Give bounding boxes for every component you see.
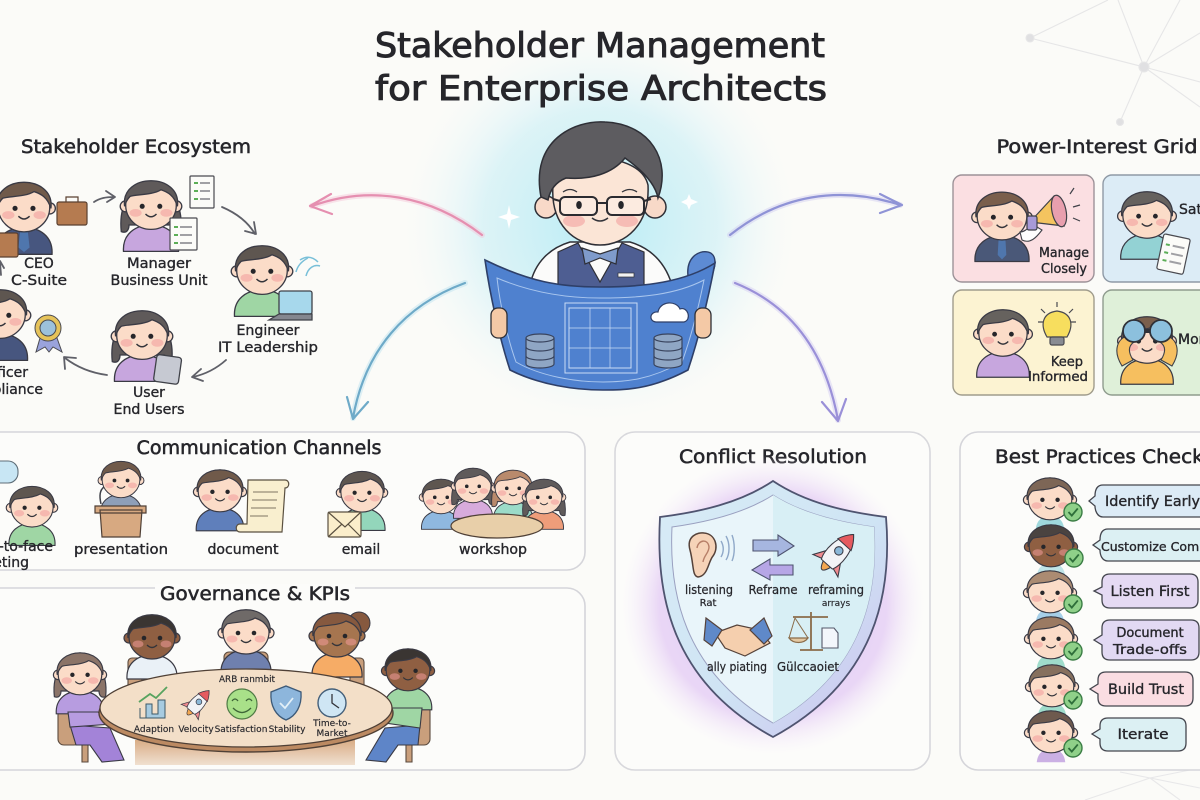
label: user: End Users bbox=[114, 402, 184, 418]
label: reframing: reframing bbox=[808, 583, 864, 597]
heading: Stakeholder Ecosystem bbox=[21, 137, 251, 158]
icon: envelope bbox=[328, 512, 361, 537]
icon: speech bubble bbox=[0, 461, 18, 483]
icon: signal bbox=[296, 257, 320, 276]
bow tie bbox=[582, 248, 618, 264]
heading: Conflict Resolution bbox=[679, 447, 867, 468]
vest bbox=[558, 243, 644, 288]
label bbox=[1028, 355, 1088, 385]
label: reframe: Reframe bbox=[748, 583, 798, 597]
icon: podium bbox=[95, 506, 146, 537]
arrow: CEO to manager bbox=[94, 191, 115, 202]
label: reframing: arrays bbox=[822, 599, 850, 609]
KPI: time-to-market: Time-to- bbox=[312, 719, 351, 729]
arrow: engineer to user bbox=[192, 360, 226, 381]
panel: governance and KPIs bbox=[0, 584, 585, 770]
label: reframing bbox=[808, 583, 864, 609]
label: CEO bbox=[11, 256, 67, 289]
KPI: adoption bbox=[134, 687, 174, 735]
table caption: ARB ranmbit bbox=[219, 675, 275, 685]
icon: briefcase bbox=[0, 197, 87, 257]
KPI: stability: Stability bbox=[269, 725, 306, 735]
person: manager with megaphone bbox=[972, 192, 1032, 262]
label: Informed bbox=[1028, 370, 1088, 385]
shield glow bbox=[621, 455, 925, 755]
item: build trust: Build Trust bbox=[1108, 682, 1185, 698]
blueprint sheet bbox=[485, 260, 715, 390]
item: email: email bbox=[342, 542, 380, 558]
item: listen first bbox=[1023, 571, 1198, 622]
item: identify early: Identify Early bbox=[1105, 494, 1200, 510]
arrow: to conflict resolution bbox=[735, 283, 846, 421]
blueprint grid bbox=[565, 303, 637, 373]
shield bbox=[659, 481, 887, 737]
architect head bbox=[535, 122, 666, 245]
item: document: document bbox=[208, 542, 279, 558]
label: ally piating: ally piating bbox=[707, 660, 767, 674]
label: manager: Manager bbox=[127, 256, 191, 272]
item: iterate bbox=[1024, 711, 1186, 762]
label: engineer: Engineer bbox=[236, 323, 300, 339]
panel: best practices checklist bbox=[960, 432, 1200, 770]
KPI: velocity: Velocity bbox=[178, 725, 214, 735]
label: manager bbox=[110, 256, 208, 289]
arrow: to communication channels bbox=[347, 283, 465, 419]
label: Keep bbox=[1051, 355, 1083, 370]
KPI: adoption: Adaption bbox=[134, 725, 174, 735]
label: manager: Business Unit bbox=[110, 273, 208, 289]
KPI: stability bbox=[269, 686, 306, 735]
quadrant: monitor bbox=[1103, 290, 1200, 395]
network decoration: bottom right bbox=[1085, 768, 1200, 800]
arrow: user to officer bbox=[64, 357, 107, 375]
item: identify early bbox=[1023, 478, 1200, 529]
title: Stakeholder Management bbox=[375, 26, 825, 66]
label: garbled: Gülccaoiet bbox=[777, 660, 839, 674]
person: table back 2 bbox=[218, 610, 274, 674]
icon: clipboard bbox=[1157, 234, 1190, 275]
workshop table bbox=[451, 514, 543, 538]
person: CEO bbox=[0, 182, 55, 254]
KPI: satisfaction bbox=[215, 689, 267, 735]
arrow: officer to CEO bbox=[0, 261, 4, 275]
arrow: manager to engineer bbox=[222, 207, 256, 234]
icon: exchange arrows bbox=[752, 535, 794, 580]
quadrant: keep informed bbox=[953, 290, 1094, 395]
item: presentation bbox=[74, 461, 168, 558]
item: customize comms bbox=[1024, 525, 1200, 576]
label: CEO: C-Suite bbox=[11, 273, 67, 289]
item: presentation: presentation bbox=[74, 542, 168, 558]
icon: rocket bbox=[809, 523, 866, 581]
item: build trust bbox=[1025, 665, 1193, 716]
heading: Power-Interest Grid bbox=[996, 137, 1198, 158]
label: listening: listening bbox=[685, 583, 733, 597]
title: for Enterprise Architects bbox=[375, 69, 827, 109]
KPI: velocity bbox=[178, 683, 218, 735]
blueprint cloud bbox=[651, 303, 688, 322]
panel: power-interest grid bbox=[953, 137, 1200, 395]
icon: laptop bbox=[269, 291, 312, 320]
label: CEO: CEO bbox=[24, 256, 54, 272]
item: listen first: Listen First bbox=[1110, 584, 1190, 600]
label: officer bbox=[0, 365, 43, 398]
network decoration: top right bbox=[1026, 0, 1200, 126]
blueprint databases bbox=[526, 334, 682, 368]
item: document trade-offs: Document bbox=[1116, 626, 1184, 641]
heading: Communication Channels bbox=[136, 438, 382, 459]
KPI: time-to-market: Market bbox=[317, 729, 348, 739]
person: with clipboard bbox=[1118, 192, 1176, 259]
arrow: to power-interest grid bbox=[730, 194, 902, 235]
panel: conflict resolution bbox=[615, 432, 930, 770]
quadrant: manage closely bbox=[953, 175, 1094, 282]
icon: binoculars bbox=[1123, 320, 1172, 342]
label: user bbox=[114, 385, 184, 418]
label: engineer bbox=[218, 323, 318, 356]
arrow: to stakeholder ecosystem bbox=[310, 194, 482, 235]
chairs bbox=[58, 652, 430, 762]
person: table right bbox=[366, 649, 435, 762]
item: workshop bbox=[419, 468, 566, 558]
arm bbox=[1020, 224, 1042, 241]
label: Manage bbox=[1039, 246, 1089, 261]
item: workshop: workshop bbox=[459, 542, 527, 558]
icon: checklists bbox=[170, 176, 214, 250]
blueprint roll bbox=[688, 252, 715, 276]
panel: communication channels bbox=[0, 432, 585, 571]
item: document trade-offs: Trade-offs bbox=[1112, 643, 1187, 658]
item: email bbox=[328, 471, 388, 558]
person bbox=[974, 310, 1032, 377]
person: engineer bbox=[231, 246, 293, 316]
icon: scroll bbox=[236, 480, 289, 532]
sparkles bbox=[498, 194, 698, 229]
title bbox=[375, 26, 827, 109]
hands bbox=[491, 308, 711, 338]
icon: tablet bbox=[153, 354, 182, 385]
icon: document bbox=[822, 628, 838, 648]
person: officer bbox=[0, 290, 31, 360]
person: table left bbox=[53, 653, 124, 762]
heading: Governance & KPIs bbox=[160, 584, 350, 605]
vest pocket bbox=[618, 273, 634, 277]
panel: stakeholder ecosystem bbox=[0, 137, 320, 418]
shoulders and shirt bbox=[530, 242, 672, 285]
label: listening bbox=[685, 583, 733, 609]
item: iterate: Iterate bbox=[1118, 727, 1168, 743]
label: listening: Rat bbox=[700, 598, 716, 609]
label: Closely bbox=[1041, 262, 1087, 277]
person: table back 3 bbox=[309, 612, 370, 677]
item: document trade-offs bbox=[1024, 617, 1199, 668]
quadrant: satisfy bbox=[1103, 175, 1200, 282]
icon: medal bbox=[35, 315, 62, 352]
item: document bbox=[193, 470, 289, 558]
central architect with blueprint bbox=[485, 122, 715, 390]
person: manager bbox=[120, 181, 182, 251]
item: face-to-face meeting bbox=[0, 461, 58, 571]
person: with binoculars bbox=[1118, 317, 1176, 384]
icon: handshake bbox=[704, 618, 772, 656]
icon: light bulb bbox=[1038, 302, 1076, 345]
label: engineer: IT Leadership bbox=[218, 340, 318, 356]
KPI: time-to-market bbox=[312, 689, 351, 739]
workshop people bbox=[419, 479, 463, 529]
icon: megaphone bbox=[1027, 188, 1080, 230]
label bbox=[1039, 246, 1089, 277]
icon: scales bbox=[789, 612, 828, 650]
arms bbox=[1117, 336, 1177, 366]
central glow bbox=[405, 30, 795, 420]
KPI: satisfaction: Satisfaction bbox=[215, 725, 267, 735]
person: user bbox=[111, 311, 173, 381]
label: user: User bbox=[133, 385, 165, 401]
person: table back 1 bbox=[124, 615, 180, 679]
table bbox=[135, 740, 355, 765]
icon: ear bbox=[689, 533, 734, 577]
